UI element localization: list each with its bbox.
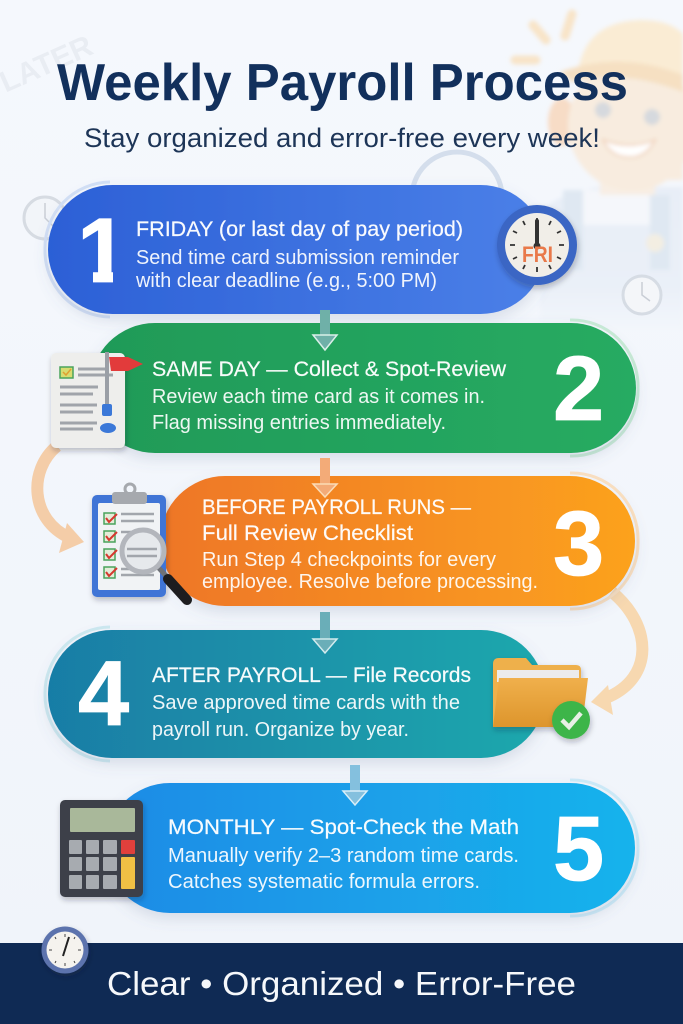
icon: document with flag [51, 352, 143, 448]
icon: footer stopwatch [42, 926, 88, 974]
body: step 4: Save approved time cards with the [152, 692, 460, 714]
footer text: Clear • Organized • Error-Free [107, 965, 576, 1002]
body: step 3: Run Step 4 checkpoints for every [202, 549, 496, 571]
heading: step 5: MONTHLY — Spot-Check the Math [168, 815, 519, 839]
body: step 1 [135, 247, 459, 292]
panel: step 4 [45, 627, 545, 761]
body: step 1: Send time card submission reminder [136, 247, 459, 269]
body: step 2 [152, 386, 485, 434]
body: step 1: with clear deadline (e.g., 5:00 PM) [135, 270, 437, 292]
number 4: 4 [78, 643, 129, 745]
number 3: 3 [553, 493, 604, 595]
icon: calculator [60, 800, 143, 897]
body: step 4 [152, 692, 460, 741]
body: step 2: Flag missing entries immediately. [152, 412, 446, 434]
heading: step 1: FRIDAY (or last day of pay period) [136, 217, 463, 241]
faded background clocks [24, 152, 661, 314]
icon: FRI clock: FRI [522, 242, 553, 267]
faded mascot: worker with hard hat [515, 14, 683, 330]
heading: step 2: SAME DAY — Collect & Spot-Review [152, 357, 506, 381]
arrow: step 2 to step 3 [313, 458, 337, 497]
icon: FRI clock [497, 205, 577, 285]
body: step 3: employee. Resolve before processing. [202, 571, 538, 593]
curved arrow: step 3 to step 4 [591, 592, 642, 715]
number 1: 1 [77, 200, 128, 302]
body: step 5: Catches systematic formula errors. [168, 871, 480, 893]
heading: step 3: Full Review Checklist [202, 521, 413, 545]
arrow: step 1 to step 2 [313, 310, 337, 350]
heading: step 3 [202, 495, 471, 545]
subtitle: Stay organized and error-free every week! [84, 123, 600, 153]
number 2: 2 [553, 338, 604, 440]
body: step 5: Manually verify 2–3 random time cards. [168, 845, 519, 867]
body: step 3 [202, 549, 538, 593]
arrow: step 3 to step 4 [313, 612, 337, 653]
icon: clipboard with magnifier [92, 484, 187, 600]
arrow: step 4 to step 5 [343, 765, 367, 805]
panel: step 5 [105, 780, 638, 916]
panel: step 3 [160, 473, 638, 609]
number 5: 5 [553, 798, 604, 900]
heading: step 3: BEFORE PAYROLL RUNS — [202, 495, 471, 519]
body: step 4: payroll run. Organize by year. [152, 719, 409, 741]
icon: folder with check [493, 658, 590, 739]
footer band [0, 943, 683, 1024]
heading: step 4: AFTER PAYROLL — File Records [152, 663, 471, 687]
panel: step 2 [90, 320, 638, 456]
title: Weekly Payroll Process [57, 54, 628, 112]
body: step 2: Review each time card as it comes in. [152, 386, 485, 408]
curved arrow: step 2 to step 3 [37, 446, 84, 553]
panel: step 1 [45, 182, 545, 317]
body: step 5 [168, 845, 519, 893]
